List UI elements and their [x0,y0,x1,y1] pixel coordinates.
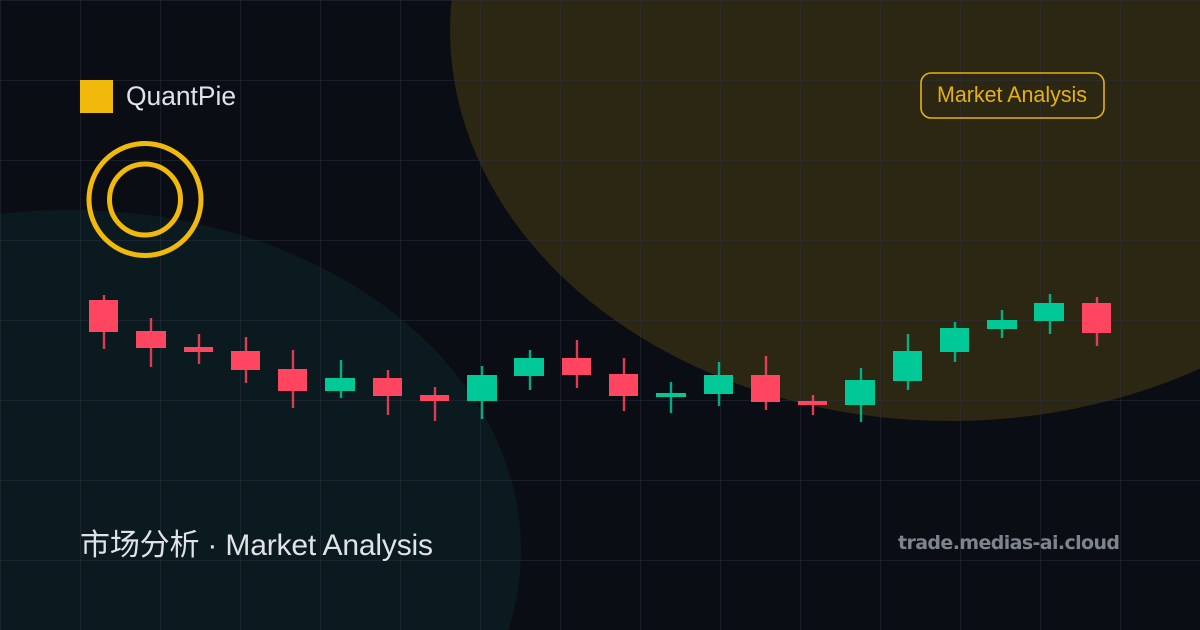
brand name: QuantPie [126,81,236,111]
candlestick chart [89,294,1111,422]
title: 市场分析 · Market Analysis [80,529,433,562]
badge: Market Analysis [921,73,1104,118]
wicks: bearish [103,295,1098,421]
teal background ellipse [0,210,521,630]
wicks: bullish [340,294,1051,422]
icon: logo square [80,80,113,113]
gold background ellipse [450,0,1200,421]
bodies: bullish candles [325,303,1064,405]
footer url: trade.medias-ai.cloud [898,532,1120,554]
badge: Market Analysis: Market Analysis [937,82,1087,107]
logo: QuantPie [80,80,236,113]
icon: concentric rings [89,144,201,256]
bodies: bearish candles [89,300,1111,405]
